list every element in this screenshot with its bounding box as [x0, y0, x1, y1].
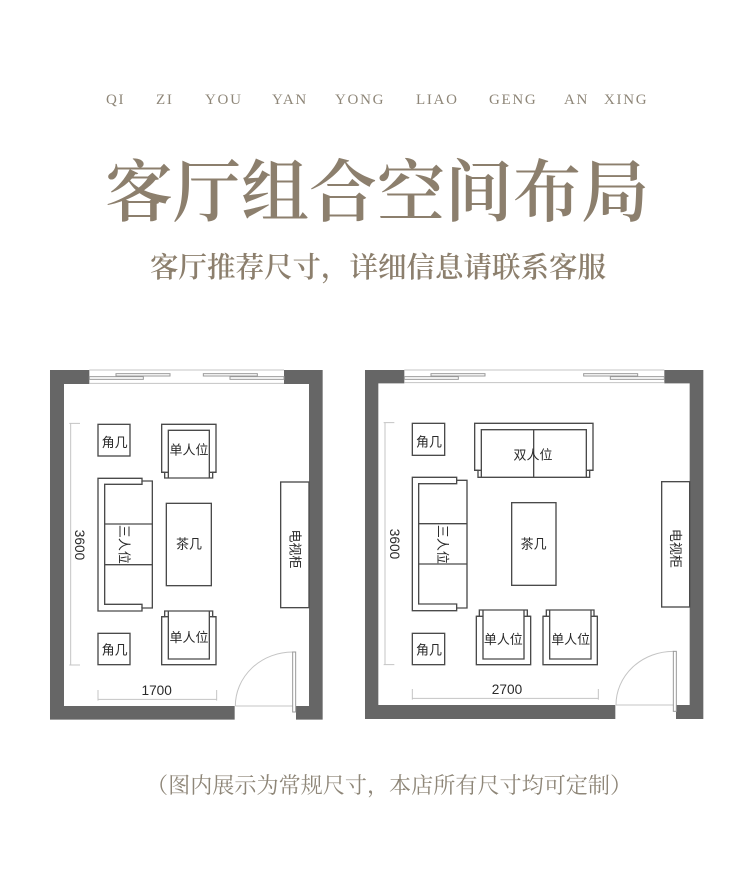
pinyin line: ZI — [156, 92, 174, 108]
corner table bottom — [98, 633, 130, 665]
single seat top — [162, 424, 216, 478]
pinyin line: YONG — [335, 92, 385, 108]
subtitle: 客厅推荐尺寸，详细信息请联系客服 — [150, 252, 607, 284]
walls — [365, 370, 703, 719]
pinyin line: YAN — [272, 92, 308, 108]
corner table bottom — [412, 633, 445, 665]
pinyin line: LIAO — [416, 92, 459, 108]
dimension 2700: 2700 — [492, 682, 523, 697]
footer note: （图内展示为常规尺寸，本店所有尺寸均可定制） — [146, 773, 632, 799]
TV cabinet — [662, 482, 690, 607]
pinyin line: QI — [106, 92, 125, 108]
single seat left — [476, 610, 531, 665]
two-seat sofa: 双人位 — [514, 447, 552, 462]
coffee table: 茶几 — [176, 536, 202, 551]
dimension 2700 — [412, 682, 598, 700]
TV cabinet: 电视柜 — [668, 529, 683, 568]
dimension 3600 — [69, 423, 87, 665]
corner table top — [98, 424, 130, 456]
three-seat sofa: 三人位 — [435, 525, 450, 564]
three-seat sofa — [98, 478, 152, 611]
pinyin line: XING — [604, 92, 648, 108]
coffee table — [166, 503, 211, 586]
walls — [50, 370, 323, 720]
pinyin line: YOU — [205, 92, 243, 108]
floor plan: 2700 layout — [365, 370, 703, 719]
floor plan: 1700 layout — [50, 370, 323, 720]
coffee table — [512, 503, 556, 585]
corner table top: 角几 — [102, 435, 128, 450]
dimension 3600: 3600 — [72, 530, 87, 561]
door — [616, 651, 676, 711]
TV cabinet: 电视柜 — [287, 530, 302, 568]
door — [235, 652, 296, 712]
three-seat sofa — [412, 477, 467, 611]
dimension 1700 — [98, 683, 217, 701]
coffee table: 茶几 — [521, 536, 547, 551]
single seat left: 单人位 — [484, 632, 523, 647]
TV cabinet — [281, 482, 309, 608]
corner table top — [412, 423, 445, 455]
single seat top: 单人位 — [170, 442, 208, 457]
pinyin line: AN — [564, 92, 589, 108]
single seat bottom — [162, 611, 216, 665]
single seat bottom: 单人位 — [170, 630, 208, 645]
window — [404, 370, 664, 383]
pinyin line: GENG — [489, 92, 537, 108]
pinyin line — [106, 92, 648, 108]
corner table bottom: 角几 — [102, 642, 128, 657]
single seat right: 单人位 — [551, 632, 590, 647]
dimension 3600: 3600 — [387, 529, 402, 560]
corner table top: 角几 — [416, 434, 442, 449]
dimension 3600 — [384, 423, 402, 665]
three-seat sofa: 三人位 — [116, 525, 131, 564]
corner table bottom: 角几 — [416, 642, 442, 657]
dimension 1700: 1700 — [141, 683, 172, 698]
title: 客厅组合空间布局 — [105, 155, 649, 231]
single seat right — [543, 610, 597, 665]
window — [89, 370, 284, 383]
two-seat sofa — [475, 423, 593, 477]
